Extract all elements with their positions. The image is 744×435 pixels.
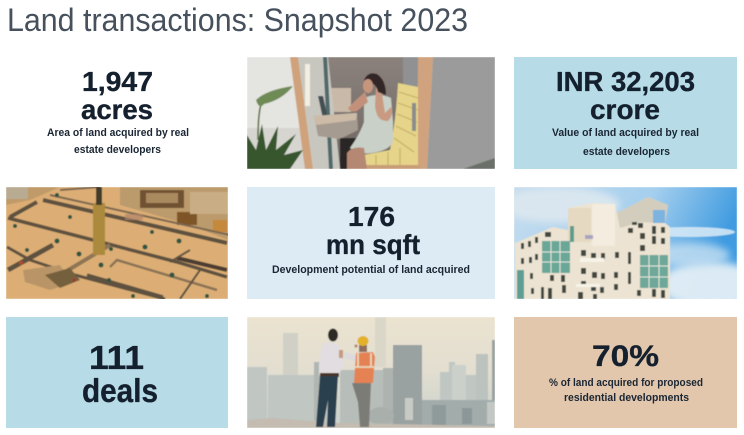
panel: area of land acquired: 1,947 (82, 66, 153, 97)
panel: value of land acquired: crore (590, 94, 660, 125)
panel: development potential (247, 187, 495, 299)
panel: residential share: residential developments (564, 392, 689, 404)
man in white shirt (319, 342, 345, 375)
panel: area of land acquired: estate developers (74, 144, 161, 156)
engineer in orange vest (344, 353, 356, 361)
panel: area of land acquired (6, 57, 228, 169)
panel: residential share: 70% (592, 340, 659, 373)
photo: two men viewing city skyline (247, 317, 495, 428)
panel: residential share: % of land acquired for proposed (549, 377, 703, 389)
panel: value of land acquired: estate developers (583, 146, 670, 158)
title: Land transactions: Snapshot 2023 (7, 2, 468, 38)
panel: number of deals: deals (82, 372, 158, 409)
plant (258, 104, 261, 140)
panel: area of land acquired: Area of land acquired by real (47, 127, 189, 139)
panel: number of deals: 111 (89, 339, 144, 376)
panel: development potential: mn sqft (326, 229, 420, 260)
panel: residential share (514, 317, 737, 428)
panel: area of land acquired: acres (81, 94, 153, 125)
panel: value of land acquired (514, 57, 737, 169)
panel: value of land acquired: Value of land acquired by real (552, 127, 699, 139)
panel: number of deals (6, 317, 228, 428)
photo: woman in office phone booth (247, 57, 495, 169)
panel: value of land acquired: INR 32,203 (556, 66, 695, 97)
panel: development potential: Development potential of land acquired (272, 264, 470, 276)
photo: residential tower (514, 187, 737, 299)
woman's dress (350, 95, 393, 153)
photo: construction site (6, 187, 230, 299)
panel: development potential: 176 (348, 201, 395, 232)
